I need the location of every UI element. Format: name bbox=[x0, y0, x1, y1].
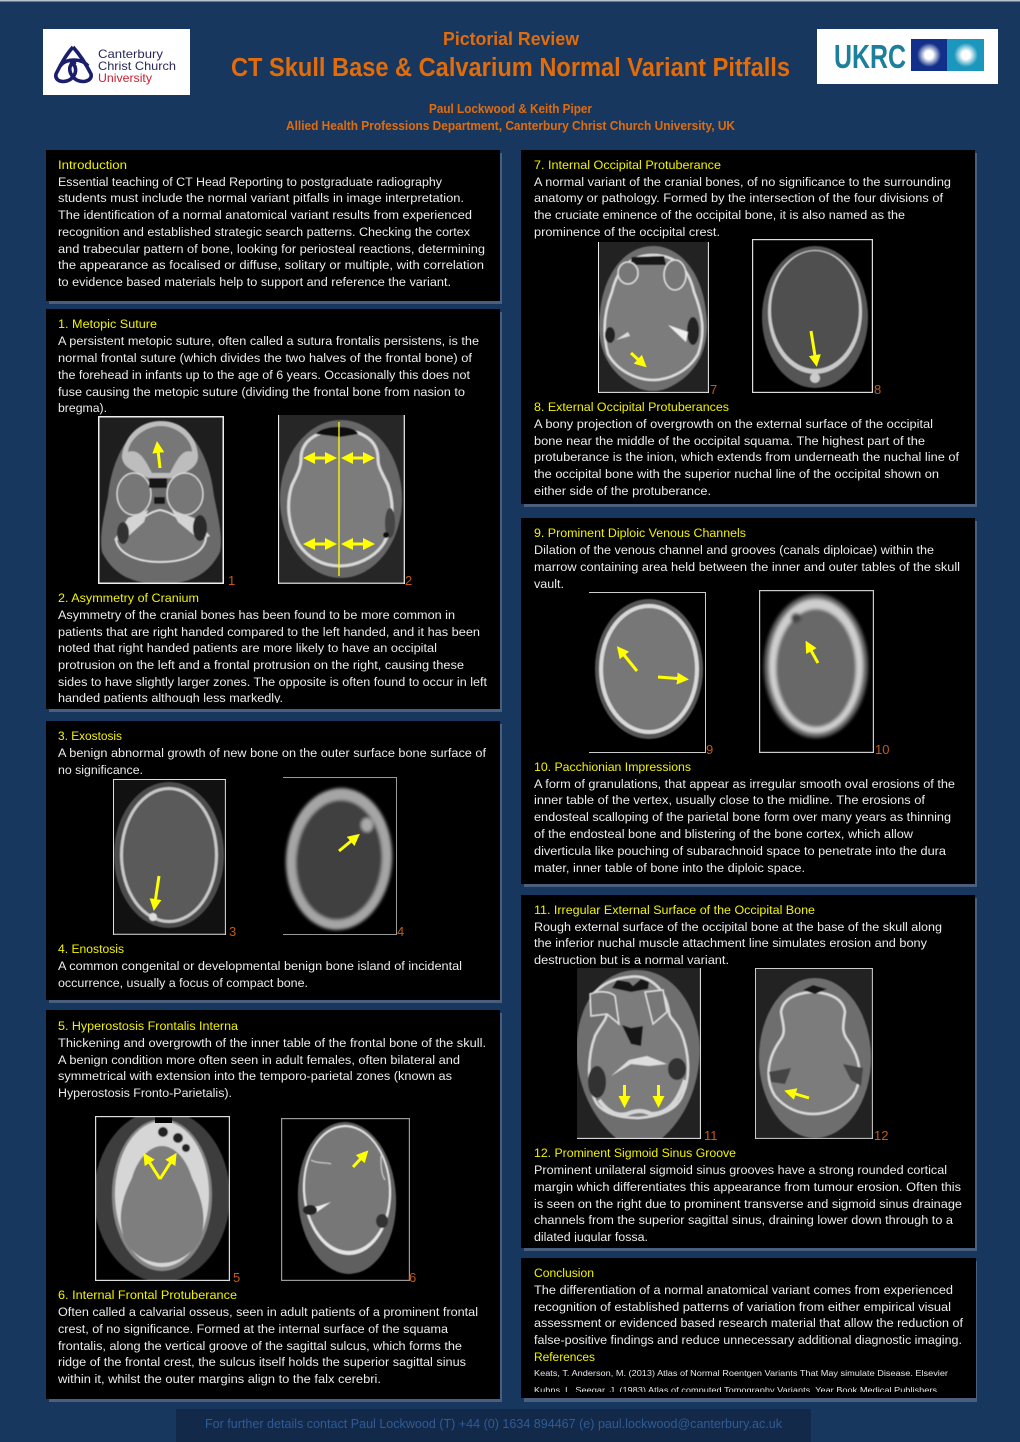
logo: Canterbury Christ Church University: University bbox=[98, 71, 152, 85]
panel: occipital surface and sigmoid groove: channels from the superior sagittal sinus, draining lower down through to a bbox=[534, 1213, 953, 1227]
CT image 5 bbox=[95, 1116, 230, 1281]
panel: exostosis and enostosis bbox=[46, 721, 502, 1003]
image number 9: 9 bbox=[706, 742, 713, 757]
panel: exostosis and enostosis: A benign abnormal growth of new bone on the outer surface bone surface of bbox=[58, 746, 487, 760]
panel: occipital protuberances: prominence of the occipital crest. bbox=[534, 225, 720, 239]
CT image 3 bbox=[113, 779, 226, 935]
title block: Pictorial Review bbox=[443, 28, 580, 49]
panel: hyperostosis and internal frontal protuberance: within it, whilst the outer margins align to the falx cerebri. bbox=[57, 1372, 381, 1386]
logo: UKRC bbox=[817, 29, 998, 84]
panel: conclusion and references: recognition of established patterns of variation from either empirical visual bbox=[534, 1300, 951, 1314]
panel: hyperostosis and internal frontal protuberance: ridge of the frontal crest, the sulcus itself holds the superior sagittal sinus bbox=[58, 1355, 466, 1369]
panel: exostosis and enostosis: A common congenital or developmental benign bone island of incidental bbox=[58, 959, 462, 973]
panel: diploic channels and pacchionian impressions: endosteal scalloping of the parietal bone form over many years as thinning bbox=[534, 810, 951, 824]
panel: diploic channels and pacchionian impressions: 9. Prominent Diploic Venous Channels bbox=[534, 526, 746, 540]
CT image 4 bbox=[283, 777, 397, 935]
panel: occipital surface and sigmoid groove: 12. Prominent Sigmoid Sinus Groove bbox=[534, 1146, 736, 1160]
panel: occipital surface and sigmoid groove: Prominent unilateral sigmoid sinus grooves have a strong rounded cortical bbox=[534, 1163, 947, 1177]
panel: occipital surface and sigmoid groove: Rough external surface of the occipital bone at the base of the skull along bbox=[534, 920, 942, 934]
panel: occipital surface and sigmoid groove bbox=[521, 895, 977, 1251]
panel: conclusion and references bbox=[521, 1258, 977, 1402]
panel: diploic channels and pacchionian impressions: inner table of the vertex, usually close to the midline. The erosions of bbox=[534, 793, 926, 807]
panel: introduction: students must include the normal variant pitfalls in image interpretation. bbox=[58, 191, 464, 205]
panel: conclusion and references: assessment or evidenced based research material that allow the reduction of bbox=[534, 1316, 964, 1330]
panel: metopic suture and asymmetry: 1. Metopic Suture bbox=[58, 317, 157, 331]
header bbox=[43, 28, 998, 133]
panel: metopic suture and asymmetry: 2. Asymmetry of Cranium bbox=[58, 591, 199, 605]
title block bbox=[231, 28, 790, 133]
panel: occipital protuberances: 7. Internal Occipital Protuberance bbox=[534, 158, 721, 172]
panel: metopic suture and asymmetry: protrusion on the left and a frontal protrusion on the right, causing these bbox=[58, 658, 464, 672]
panel: metopic suture and asymmetry: Asymmetry of the cranial bones has been found to be more common in bbox=[58, 608, 455, 622]
image number 8: 8 bbox=[874, 382, 881, 397]
panel: diploic channels and pacchionian impressions bbox=[521, 518, 977, 887]
panel: occipital protuberances: protuberance is the inion, which extends from underneath the nuchal line of bbox=[534, 450, 960, 464]
panel: introduction: The identification of a normal anatomical variant results from experienced bbox=[58, 208, 472, 222]
panel: occipital protuberances: anatomy or pathology. Formed by the intersection of the four divisions of bbox=[534, 191, 944, 205]
image number 4: 4 bbox=[397, 924, 404, 939]
panel: occipital surface and sigmoid groove: destruction but is a normal variant. bbox=[534, 953, 729, 967]
panel: occipital protuberances: bone near the middle of the occipital squama. The highest part of the bbox=[534, 434, 925, 448]
panel: metopic suture and asymmetry: noted that right handed patients are more likely to have an occipital bbox=[58, 641, 437, 655]
panel: hyperostosis and internal frontal protuberance bbox=[46, 1010, 502, 1402]
panel: diploic channels and pacchionian impressions: 10. Pacchionian Impressions bbox=[534, 760, 691, 774]
panel: metopic suture and asymmetry bbox=[46, 309, 502, 712]
image number 5: 5 bbox=[233, 1270, 240, 1285]
panel: metopic suture and asymmetry: A persistent metopic suture, often called a sutura frontalis persistens, is the bbox=[58, 334, 479, 348]
image number 3: 3 bbox=[229, 924, 236, 939]
panel: diploic channels and pacchionian impressions: vault. bbox=[534, 577, 564, 591]
panel: diploic channels and pacchionian impressions: of the endosteal bone and blistering of the bone cortex, which allow bbox=[534, 827, 913, 841]
panel: hyperostosis and internal frontal protuberance: symmetrical with extension into the temporo-parietal zones (known as bbox=[58, 1069, 452, 1083]
panel: exostosis and enostosis: 3. Exostosis bbox=[58, 729, 122, 743]
panel: occipital protuberances: A normal variant of the cranial bones, of no significance to the surrounding bbox=[534, 175, 951, 189]
panel: introduction: Introduction bbox=[58, 158, 127, 172]
image number 7: 7 bbox=[710, 382, 717, 397]
panel: hyperostosis and internal frontal protuberance: frontalis, along the vertical groove of the sagittal sulcus, which forms the bbox=[58, 1339, 462, 1353]
panel: diploic channels and pacchionian impressions: Dilation of the venous channel and grooves (canals diploicae) within the bbox=[534, 543, 934, 557]
panel: diploic channels and pacchionian impressions: A form of granulations, that appear as irregular smooth oval erosions of the bbox=[534, 777, 955, 791]
panel: hyperostosis and internal frontal protuberance: Often called a calvarial osseus, seen in adult patients of a prominent frontal bbox=[58, 1305, 478, 1319]
panel: metopic suture and asymmetry: fuse causing the metopic suture (dividing the frontal bone from nasion to bbox=[58, 385, 465, 399]
panel: introduction: Essential teaching of CT Head Reporting to postgraduate radiography bbox=[58, 175, 443, 189]
panel: occipital surface and sigmoid groove: is seen on the right due to prominent transverse and sigmoid sinus drainage bbox=[534, 1197, 962, 1211]
panel: metopic suture and asymmetry: normal frontal suture (which divides the two halves of the frontal bone) of bbox=[58, 351, 473, 365]
panel: introduction: and trabecular pattern of bone, looking for periosteal reactions, determining bbox=[58, 242, 485, 256]
CT image 11 bbox=[577, 968, 701, 1139]
panel: occipital surface and sigmoid groove: margin which differentiates this appearance from tumour erosion. Often this bbox=[534, 1180, 961, 1194]
CT image 12 bbox=[755, 968, 873, 1139]
panel: occipital surface and sigmoid groove: 11. Irregular External Surface of the Occipital Bone bbox=[534, 903, 815, 917]
panel: metopic suture and asymmetry: sides to have slightly larger zones. The opposite is often found to occur in left bbox=[58, 675, 488, 689]
CT image 10 bbox=[759, 590, 874, 753]
panel: conclusion and references: false-positive findings and reduce unnecessary additional diagnostic imaging. bbox=[534, 1333, 962, 1347]
image number 2: 2 bbox=[405, 573, 412, 588]
panel: metopic suture and asymmetry: patients that are right handed compared to the left handed, and it has been bbox=[58, 625, 480, 639]
footer contact bar bbox=[176, 1409, 811, 1442]
logo: UKRC: UKRC bbox=[834, 38, 906, 75]
panel: introduction: recognition and established strategic search patterns. Checking the cortex bbox=[58, 225, 471, 239]
panel: introduction: to evidence based materials help to support and reference the variant. bbox=[58, 275, 451, 289]
logo: Canterbury Christ Church University: Canterbury bbox=[98, 47, 163, 61]
panel: exostosis and enostosis: 4. Enostosis bbox=[58, 942, 124, 956]
CT image 9 bbox=[589, 592, 706, 753]
image number 12: 12 bbox=[874, 1128, 888, 1143]
panel: conclusion and references: References bbox=[534, 1350, 595, 1364]
panel: hyperostosis and internal frontal protuberance: 5. Hyperostosis Frontalis Interna bbox=[58, 1019, 238, 1033]
logo: Canterbury Christ Church University bbox=[43, 29, 190, 95]
panel: hyperostosis and internal frontal protuberance: Thickening and overgrowth of the inner table of the frontal bone of the skull. bbox=[58, 1036, 486, 1050]
CT image 8 bbox=[752, 239, 873, 393]
panel: conclusion and references: Conclusion bbox=[534, 1266, 594, 1280]
panel: occipital protuberances: the occipital bone with the superior nuchal line of the occipital shown on bbox=[534, 467, 939, 481]
title block: Allied Health Professions Department, Canterbury Christ Church University, UK bbox=[286, 119, 735, 133]
panel: exostosis and enostosis: occurrence, usually a focus of compact bone. bbox=[58, 976, 308, 990]
panel: diploic channels and pacchionian impressions: diverticula like pouching of subarachnoid space to penetrate into the dura bbox=[534, 844, 946, 858]
panel: hyperostosis and internal frontal protuberance: 6. Internal Frontal Protuberance bbox=[58, 1288, 237, 1302]
panel: occipital protuberances: the cruciate eminence of the occipital bone, it is also named as the bbox=[534, 208, 905, 222]
panel: occipital protuberances: 8. External Occipital Protuberances bbox=[534, 400, 729, 414]
panel: metopic suture and asymmetry: the forehead in infants up to the age of 6 years. Occasionally this does not bbox=[58, 368, 471, 382]
panel: metopic suture and asymmetry: bregma). bbox=[58, 401, 107, 415]
title block: CT Skull Base & Calvarium Normal Variant Pitfalls bbox=[231, 54, 790, 82]
panel: occipital surface and sigmoid groove: dilated jugular fossa. bbox=[534, 1230, 648, 1244]
panel: conclusion and references: Keats, T. Anderson, M. (2013) Atlas of Normal Roentgen Variants That May simulate Disease. Elsevier bbox=[534, 1368, 948, 1378]
panel: occipital surface and sigmoid groove: the inferior nuchal muscle attachment line simulates erosion and bony bbox=[534, 936, 928, 950]
panel: introduction: the appearance as focalised or diffuse, solitary or multiple, with correlation bbox=[58, 258, 484, 272]
panel: occipital protuberances: either side of the protuberance. bbox=[534, 484, 711, 498]
image number 11: 11 bbox=[704, 1128, 718, 1143]
image number 6: 6 bbox=[409, 1270, 416, 1285]
CT image 6 bbox=[281, 1118, 410, 1281]
image number 10: 10 bbox=[875, 742, 889, 757]
panel: metopic suture and asymmetry: handed patients although less markedly. bbox=[58, 691, 283, 705]
CT image 7 bbox=[598, 242, 709, 393]
logo: Canterbury Christ Church University: Christ Church bbox=[98, 59, 176, 73]
panel: diploic channels and pacchionian impressions: mater, inner table of bone into the diploic space. bbox=[534, 861, 805, 875]
panel: exostosis and enostosis: no significance. bbox=[58, 763, 143, 777]
panel: conclusion and references: Kuhns, L. Seegar, J. (1983) Atlas of computed Tomography Variants. Year Book Medical Publishers bbox=[534, 1385, 937, 1395]
panel: diploic channels and pacchionian impressions: marrow containing area held between the inner and outer tables of the skull bbox=[534, 560, 960, 574]
CT image 2 bbox=[278, 415, 405, 584]
panel: hyperostosis and internal frontal protuberance: crest, of no significance. Formed at the internal surface of the squama bbox=[58, 1322, 448, 1336]
CT image 1 bbox=[98, 416, 224, 584]
panel: hyperostosis and internal frontal protuberance: Hyperostosis Fronto-Parietalis). bbox=[58, 1086, 232, 1100]
title block: Paul Lockwood & Keith Piper bbox=[429, 102, 592, 116]
panel: introduction bbox=[46, 150, 502, 304]
panel: occipital protuberances bbox=[521, 150, 977, 507]
panel: conclusion and references: The differentiation of a normal anatomical variant comes from experienced bbox=[534, 1283, 953, 1297]
footer contact bar: For further details contact Paul Lockwood (T) +44 (0) 1634 894467 (e) paul.lockwood@canterbury.ac.uk bbox=[205, 1417, 783, 1431]
panel: occipital protuberances: A bony projection of overgrowth on the external surface of the occipital bbox=[534, 417, 933, 431]
panel: hyperostosis and internal frontal protuberance: A benign condition more often seen in adult females, often bilateral and bbox=[58, 1053, 460, 1067]
image number 1: 1 bbox=[228, 573, 235, 588]
